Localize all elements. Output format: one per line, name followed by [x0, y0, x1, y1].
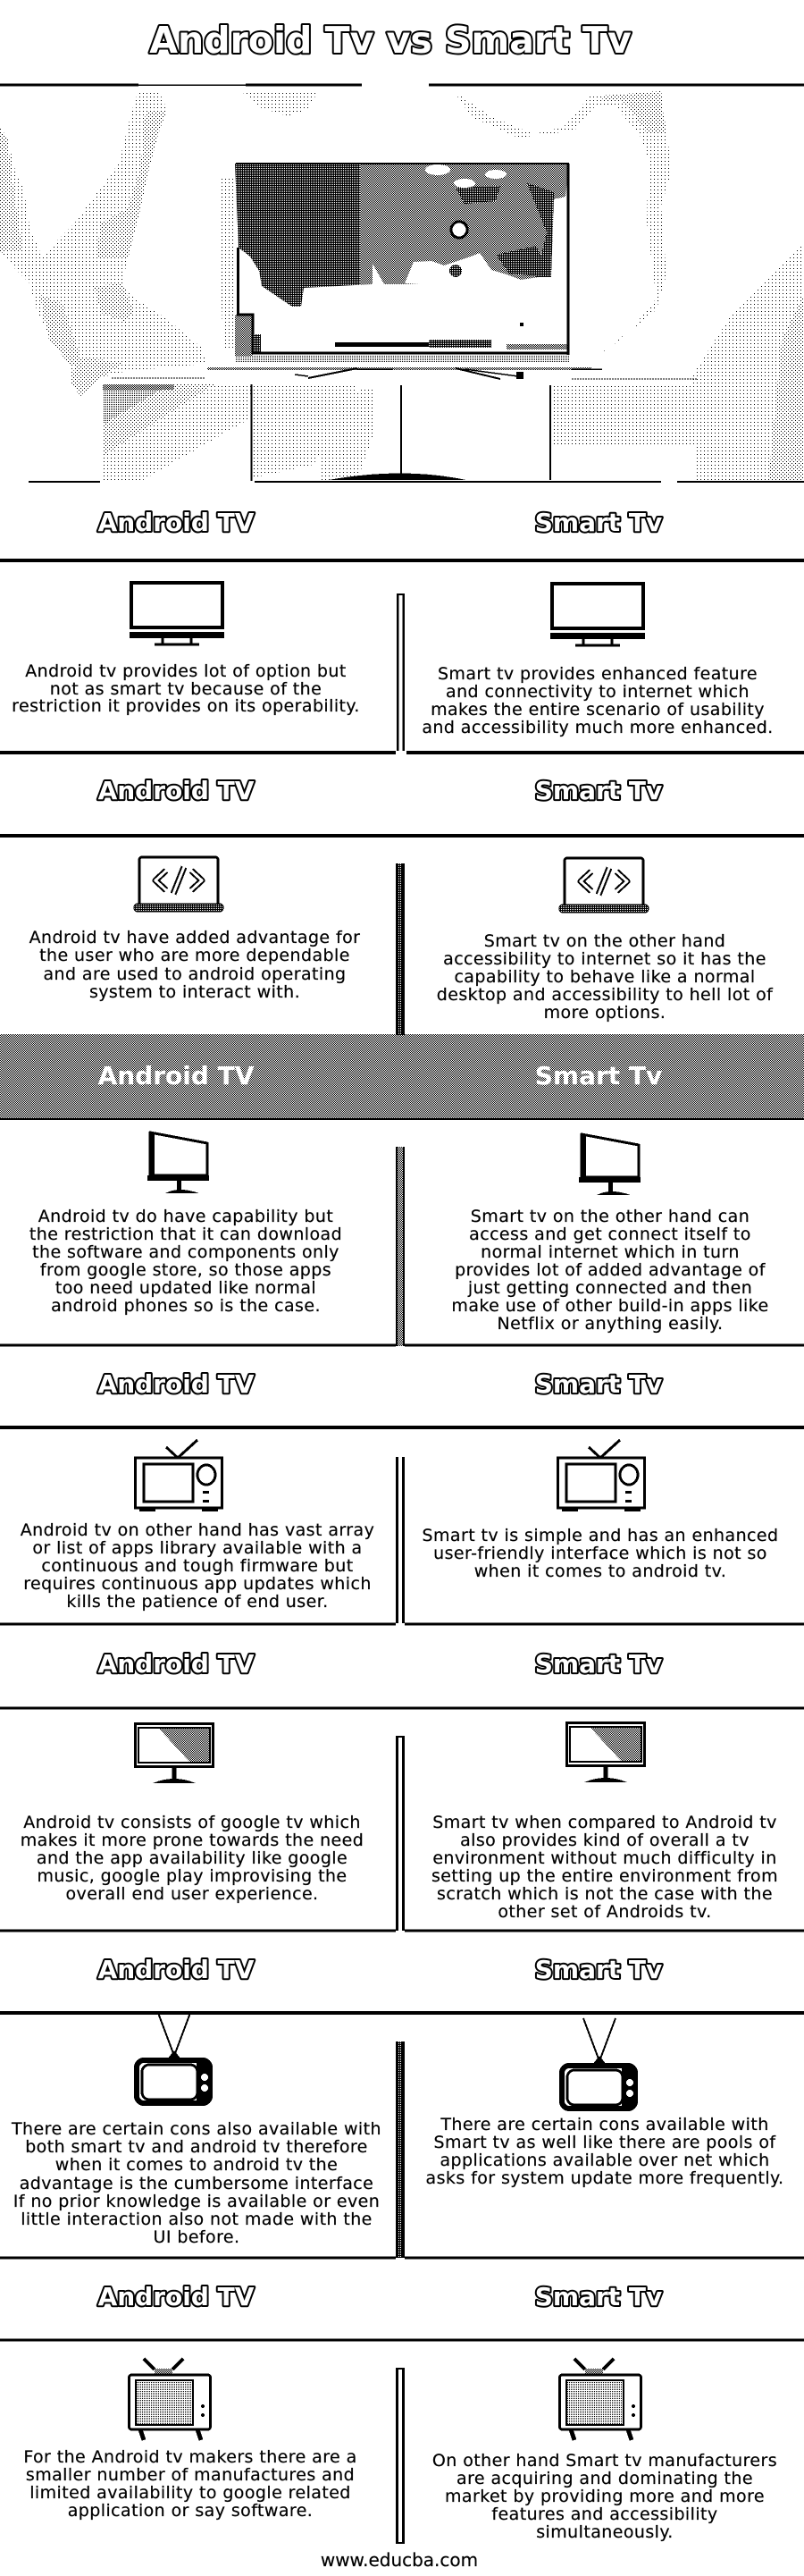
- section 3: [0, 1034, 804, 1346]
- text: Android point 7: limited availability to google related: [29, 2483, 351, 2503]
- title: Android Tv vs Smart Tv: [149, 19, 632, 62]
- text: Smart point 5: environment without much difficulty in: [432, 1848, 777, 1868]
- text: Smart point 4: Smart tv is simple and has an enhanced: [423, 1526, 778, 1545]
- text: Smart point 7: are acquiring and dominating the: [456, 2469, 753, 2488]
- text: Android point 4: requires continuous app updates which: [23, 1574, 372, 1594]
- heading: Android TV: Android TV: [98, 1955, 255, 1984]
- text: Android point 2: Android tv have added advantage for: [29, 928, 360, 947]
- text: Android point 6: There are certain cons also available with: [11, 2119, 381, 2139]
- text: Android point 6: both smart tv and android tv therefore: [25, 2137, 368, 2157]
- section 7: [0, 2282, 804, 2544]
- text: Android point 2: [29, 928, 360, 1002]
- text: Smart point 3: Netflix or anything easily.: [498, 1314, 723, 1334]
- text: Smart point 6: Smart tv as well like there are pools of: [434, 2133, 776, 2152]
- divider: [397, 593, 405, 751]
- text: Smart point 6: asks for system update more frequently.: [426, 2168, 783, 2188]
- section 6: [0, 1955, 804, 2258]
- text: Smart point 3: access and get connect itself to: [469, 1225, 751, 1244]
- curtain shading right: [454, 91, 804, 483]
- text: Android point 4: kills the patience of end user.: [66, 1592, 329, 1612]
- text: Android point 3: the software and components only: [32, 1242, 339, 1262]
- text: Android point 3: too need updated like normal: [55, 1278, 316, 1298]
- text: Smart point 1: Smart tv provides enhanced feature: [438, 664, 758, 684]
- text: Smart point 6: applications available over net which: [440, 2151, 770, 2170]
- icon: tilted monitor left: [147, 1132, 209, 1193]
- text: Smart point 5: Smart tv when compared to Android tv: [432, 1813, 777, 1832]
- text: Smart point 7: features and accessibility: [491, 2504, 718, 2524]
- text: Android point 5: Android tv consists of google tv which: [23, 1813, 361, 1832]
- text: Smart point 1: [422, 664, 774, 737]
- section 4: [0, 1369, 804, 1624]
- heading: Smart Tv: Smart Tv: [535, 2282, 662, 2311]
- text: Smart point 3: Smart tv on the other hand can: [471, 1207, 750, 1226]
- divider: [396, 2368, 405, 2544]
- text: Android point 2: and are used to android operating: [43, 964, 347, 984]
- heading: Android TV: Android TV: [98, 2282, 255, 2311]
- text: Smart point 3: [451, 1207, 769, 1334]
- text: Android point 6: advantage is the cumbersome interface: [20, 2174, 373, 2193]
- footer url: www.educba.com: [321, 2549, 478, 2571]
- icon: laptop code right: [559, 858, 649, 913]
- heading: Smart Tv: Smart Tv: [535, 1369, 662, 1399]
- text: Android point 4: [21, 1520, 374, 1612]
- text: Android point 4: Android tv on other hand has vast array: [21, 1520, 374, 1540]
- text: Smart point 7: On other hand Smart tv manufacturers: [432, 2451, 777, 2471]
- icon: retro TV right: [557, 1440, 645, 1511]
- text: Android point 6: little interaction also not made with the: [21, 2210, 373, 2229]
- text: Android point 3: [29, 1207, 342, 1316]
- text: Android point 7: [23, 2447, 357, 2521]
- text: Smart point 5: setting up the entire environment from: [431, 1866, 778, 1886]
- text: Smart point 2: capability to behave like a normal: [454, 967, 756, 987]
- icon: vintage TV left: [129, 2359, 211, 2440]
- heading: Android TV: Android TV: [98, 508, 255, 537]
- text: Smart point 3: provides lot of added advantage of: [455, 1260, 766, 1280]
- text: Android point 3: android phones so is the case.: [51, 1296, 321, 1316]
- text: Android point 5: and the app availability like google: [37, 1848, 348, 1868]
- grey heading band: [0, 1034, 804, 1119]
- text: Android point 7: For the Android tv makers there are a: [23, 2447, 357, 2467]
- text: Smart point 5: scratch which is not the case with the: [437, 1884, 773, 1904]
- icon: antenna TV right: [562, 2018, 635, 2109]
- divider: [396, 1736, 405, 1931]
- text: Android point 1: restriction it provides on its operability.: [12, 696, 360, 716]
- text: Smart point 7: market by providing more and more: [445, 2487, 765, 2506]
- cabinet: [29, 378, 804, 482]
- divider: [396, 863, 405, 1035]
- heading: Android TV: Android TV: [98, 1369, 255, 1399]
- text: Android point 7: application or say software.: [68, 2501, 313, 2521]
- text: Smart point 2: [437, 931, 774, 1023]
- icon: monitor with glare right: [566, 1723, 645, 1782]
- icon: flat monitor right: [550, 584, 645, 645]
- icon: tilted monitor right: [579, 1134, 641, 1195]
- text: Smart point 2: accessibility to internet so it has the: [443, 949, 766, 969]
- heading: Android TV: Android TV: [98, 1649, 255, 1679]
- divider: [396, 1457, 405, 1623]
- heading: Smart Tv: Smart Tv: [535, 776, 662, 805]
- icon: laptop code left: [134, 857, 223, 912]
- text: Android point 5: [21, 1813, 364, 1904]
- text: Smart point 5: other set of Androids tv.: [498, 1902, 712, 1922]
- text: Smart point 2: desktop and accessibility to hell lot of: [437, 985, 774, 1005]
- text: Smart point 7: simultaneously.: [536, 2522, 674, 2542]
- text: Android point 5: overall end user experience.: [65, 1884, 319, 1904]
- text: Smart point 4: [423, 1526, 778, 1581]
- text: Android point 4: continuous and tough firmware but: [41, 1556, 354, 1576]
- top rule of hero: [0, 84, 804, 86]
- text: Smart point 1: makes the entire scenario of usability: [431, 700, 765, 720]
- text: Smart point 4: user-friendly interface which is not so: [433, 1544, 767, 1563]
- heading: Smart Tv: Smart Tv: [535, 1061, 662, 1090]
- text: Smart point 7: [432, 2451, 777, 2542]
- text: Android point 1: Android tv provides lot of option but: [25, 661, 347, 681]
- heading: Smart Tv: Smart Tv: [535, 1955, 662, 1984]
- text: Smart point 5: [431, 1813, 778, 1922]
- divider: [396, 2041, 405, 2258]
- divider: [396, 1147, 405, 1346]
- text: Smart point 3: normal internet which in turn: [481, 1242, 740, 1262]
- heading: Android TV: Android TV: [98, 1061, 255, 1090]
- text: Android point 4: or list of apps library available with a: [32, 1538, 363, 1558]
- text: Android point 3: the restriction that it can download: [29, 1225, 342, 1244]
- text: Android point 3: from google store, so those apps: [40, 1260, 331, 1280]
- text: Android point 6: UI before.: [154, 2227, 239, 2247]
- text: Smart point 2: more options.: [544, 1003, 666, 1023]
- text: Smart point 3: just getting connected and then: [467, 1278, 752, 1298]
- text: Android point 1: [12, 661, 360, 716]
- heading: Android TV: Android TV: [98, 776, 255, 805]
- section 5: [0, 1649, 804, 1931]
- icon: vintage TV right: [559, 2359, 641, 2440]
- text: Smart point 5: also provides kind of overall a tv: [460, 1831, 750, 1850]
- text: Android point 1: not as smart tv because of the: [50, 679, 322, 699]
- TV screen: [235, 164, 569, 356]
- hero image: TV on cabinet: [0, 85, 804, 483]
- text: Smart point 2: Smart tv on the other hand: [484, 931, 725, 951]
- text: Smart point 6: [426, 2115, 783, 2188]
- section 1: [0, 508, 804, 753]
- icon: retro TV left: [136, 1440, 222, 1511]
- text: Android point 5: music, google play improvising the: [37, 1866, 348, 1886]
- text: Android point 2: system to interact with.: [89, 982, 300, 1002]
- text: Android point 6: If no prior knowledge is available or even: [13, 2192, 380, 2211]
- text: Android point 7: smaller number of manufactures and: [26, 2465, 355, 2485]
- text: Android point 3: Android tv do have capability but: [38, 1207, 333, 1226]
- section 2: [0, 776, 804, 1035]
- text: Android point 6: [11, 2119, 381, 2247]
- icon: flat monitor left: [130, 583, 224, 644]
- icon: monitor with glare left: [136, 1723, 213, 1783]
- text: Smart point 1: and accessibility much more enhanced.: [422, 718, 774, 737]
- heading: Smart Tv: Smart Tv: [535, 1649, 662, 1679]
- text: Smart point 1: and connectivity to internet which: [446, 682, 750, 702]
- curtain shading left: [0, 91, 318, 396]
- text: Smart point 4: when it comes to android tv.: [474, 1562, 726, 1581]
- text: Android point 6: when it comes to android tv the: [55, 2155, 338, 2175]
- text: Smart point 6: There are certain cons available with: [440, 2115, 769, 2134]
- text: Android point 2: the user who are more dependable: [39, 946, 350, 965]
- icon: antenna TV left: [137, 2013, 210, 2103]
- heading: Smart Tv: Smart Tv: [535, 508, 662, 537]
- TV stand and shadow: [207, 356, 602, 379]
- text: Android point 5: makes it more prone towards the need: [21, 1831, 364, 1850]
- text: Smart point 3: make use of other build-in apps like: [451, 1296, 769, 1316]
